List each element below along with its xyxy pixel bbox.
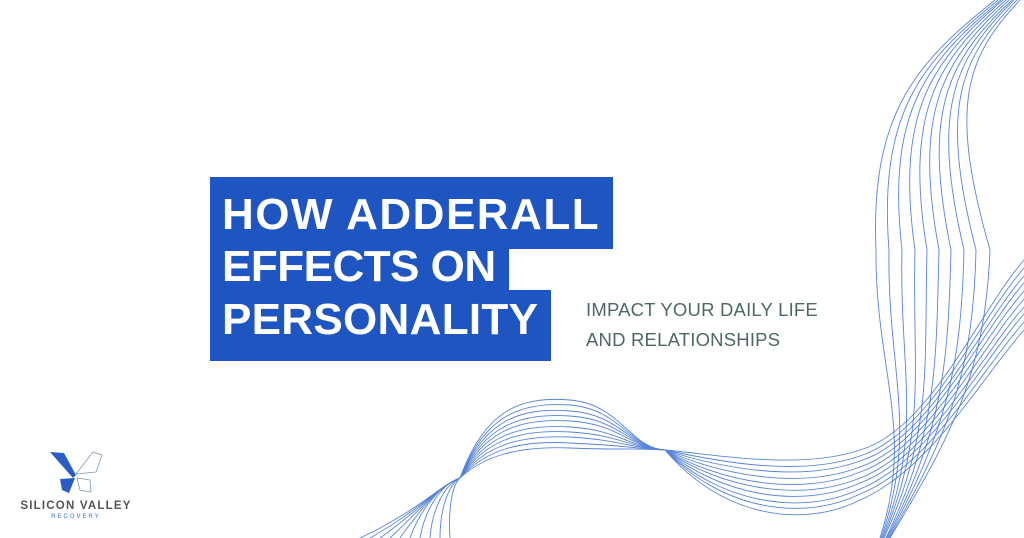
logo text: SILICON VALLEY — [20, 500, 132, 512]
icon: butterfly — [50, 452, 102, 493]
logo — [20, 452, 132, 520]
subtitle: IMPACT YOUR DAILY LIFE — [586, 299, 818, 320]
title block: PERSONALITY — [222, 295, 538, 344]
subtitle: AND RELATIONSHIPS — [586, 329, 780, 350]
logo: RECOVERY — [51, 514, 101, 520]
title block: EFFECTS ON — [222, 242, 496, 291]
title block — [210, 177, 613, 361]
subtitle — [586, 299, 818, 350]
title block: HOW ADDERALL — [222, 190, 600, 239]
